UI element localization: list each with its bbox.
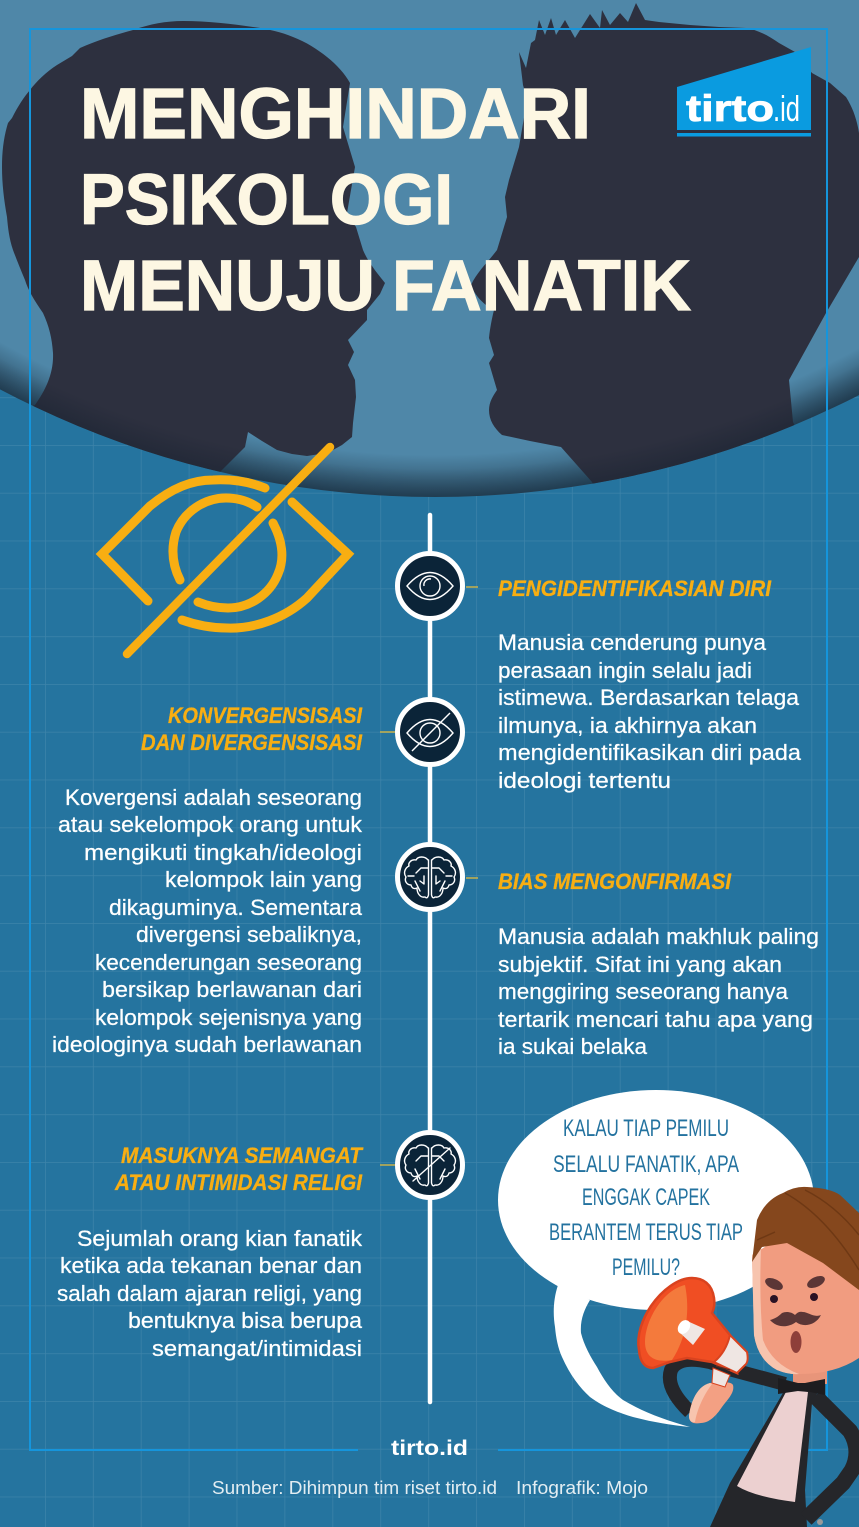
icon: eye node: [398, 554, 462, 618]
text block: Pengidentifikasian Diri: perasaan ingin selalu jadi: [498, 658, 752, 683]
text block: Bias Mengonfirmasi: ia sukai belaka: [498, 1034, 648, 1059]
text block: Pengidentifikasian Diri: [498, 576, 802, 793]
bubble text: ENGGAK CAPEK: [582, 1184, 710, 1211]
bubble text: SELALU FANATIK, APA: [553, 1151, 739, 1178]
hand: [689, 1382, 733, 1423]
bubble text: BERANTEM TERUS TIAP: [549, 1219, 743, 1246]
text block: Konvergensisasi dan Divergensisasi: ideologinya sudah berlawanan: [52, 1032, 362, 1057]
text block: Konvergensisasi dan Divergensisasi: divergensi sebaliknya,: [136, 922, 362, 947]
handle mark: [716, 1366, 730, 1370]
megaphone bell light area: [645, 1285, 687, 1361]
text block: Pengidentifikasian Diri: PENGIDENTIFIKASIAN DIRI: [498, 576, 772, 601]
text block: Bias Mengonfirmasi: subjektif. Sifat ini yang akan: [498, 952, 782, 977]
text block: Bias Mengonfirmasi: menggiring seseorang hanya: [498, 979, 789, 1004]
icon: brain node: [398, 844, 462, 910]
text block: Pengidentifikasian Diri: ilmunya, ia akhirnya akan: [498, 713, 757, 738]
logo: tirto.id: .id: [773, 88, 800, 129]
text block: Konvergensisasi dan Divergensisasi: atau sekelompok orang untuk: [58, 812, 363, 837]
icon: crossed eye node: [398, 700, 462, 764]
title: PSIKOLOGI: [80, 161, 453, 240]
jacket: [710, 1386, 820, 1527]
text block: Masuknya Semangat: ketika ada tekanan benar dan: [60, 1253, 362, 1278]
text block: Konvergensisasi dan Divergensisasi: KONVERGENSISASI: [168, 703, 363, 728]
silhouette: right head: [471, 3, 859, 500]
text block: Konvergensisasi dan Divergensisasi: kelompok lain yang: [165, 867, 362, 892]
text block: Pengidentifikasian Diri: ideologi tertentu: [498, 768, 671, 793]
source credits: [212, 1477, 648, 1498]
text block: Konvergensisasi dan Divergensisasi: DAN DIVERGENSISASI: [141, 730, 363, 755]
text block: Masuknya Semangat: [57, 1143, 363, 1361]
text block: Konvergensisasi dan Divergensisasi: [52, 703, 363, 1057]
text block: Konvergensisasi dan Divergensisasi: bersikap berlawanan dari: [102, 977, 362, 1002]
moustache: [770, 1312, 821, 1326]
jacket button: [817, 1519, 823, 1525]
title: MENGHINDARI: [80, 75, 591, 154]
silhouette edge shading: [0, 368, 859, 497]
megaphone tail: [714, 1335, 748, 1373]
megaphone cap: [675, 1318, 705, 1345]
hand highlight: [689, 1383, 712, 1422]
text block: Bias Mengonfirmasi: tertarik mencari tahu apa yang: [498, 1007, 813, 1032]
bow tie: [778, 1378, 825, 1395]
silhouette: left head: [0, 21, 385, 500]
icon: crossed brain node: [398, 1132, 462, 1198]
title: [80, 75, 691, 326]
icon: large crossed eye: [102, 447, 348, 654]
source credits: Infografik: Mojo: [516, 1477, 648, 1498]
text block: Bias Mengonfirmasi: Manusia adalah makhluk paling: [498, 924, 819, 949]
eyebrows: [763, 1273, 827, 1293]
footer brand: tirto.id: [391, 1437, 468, 1460]
character with megaphone: [638, 1187, 859, 1527]
speech bubble: [498, 1090, 814, 1427]
text block: Pengidentifikasian Diri: Manusia cenderung punya: [498, 630, 767, 655]
bubble text: [549, 1115, 743, 1281]
text block: Konvergensisasi dan Divergensisasi: kecenderungan seseorang: [95, 950, 362, 975]
header dome with two silhouettes: [0, 0, 859, 520]
text block: Konvergensisasi dan Divergensisasi: kelompok sejenisnya yang: [95, 1005, 362, 1030]
title: FANATIK: [392, 247, 691, 326]
text block: Pengidentifikasian Diri: istimewa. Berdasarkan telaga: [498, 685, 800, 710]
text block: Bias Mengonfirmasi: BIAS MENGONFIRMASI: [498, 869, 732, 894]
text block: Masuknya Semangat: ATAU INTIMIDASI RELIGI: [114, 1170, 363, 1195]
source credits: Sumber: Dihimpun tim riset tirto.id: [212, 1477, 497, 1498]
text block: Masuknya Semangat: MASUKNYA SEMANGAT: [121, 1143, 363, 1168]
turban: [752, 1187, 859, 1290]
neck: [793, 1368, 827, 1384]
bubble text: PEMILU?: [612, 1254, 680, 1281]
connector lines: [380, 587, 478, 1165]
mouth: [790, 1331, 802, 1353]
eyes: [770, 1293, 818, 1303]
logo: tirto.id: tirto: [686, 88, 774, 129]
text block: Konvergensisasi dan Divergensisasi: dikaguminya. Sementara: [109, 895, 363, 920]
near arm: [670, 1360, 785, 1412]
text block: Konvergensisasi dan Divergensisasi: mengikuti tingkah/ideologi: [84, 840, 362, 865]
shirt: [737, 1390, 808, 1502]
megaphone handle: [712, 1368, 730, 1387]
megaphone body: [638, 1278, 737, 1373]
text block: Masuknya Semangat: bentuknya bisa berupa: [128, 1308, 363, 1333]
timeline line: [428, 515, 432, 1402]
text block: Masuknya Semangat: Sejumlah orang kian fanatik: [77, 1226, 363, 1251]
far arm: [806, 1396, 857, 1519]
face: [752, 1225, 859, 1374]
text block: Konvergensisasi dan Divergensisasi: Kovergensi adalah seseorang: [65, 785, 362, 810]
text block: Pengidentifikasian Diri: mengidentifikasikan diri pada: [498, 740, 802, 765]
title: MENUJU: [80, 247, 375, 326]
face highlight: [752, 1248, 799, 1374]
text block: Masuknya Semangat: salah dalam ajaran religi, yang: [57, 1281, 362, 1306]
text block: Masuknya Semangat: semangat/intimidasi: [152, 1336, 362, 1361]
bubble text: KALAU TIAP PEMILU: [563, 1115, 729, 1142]
logo: tirto.id: [677, 47, 811, 136]
text block: Bias Mengonfirmasi: [498, 869, 819, 1059]
